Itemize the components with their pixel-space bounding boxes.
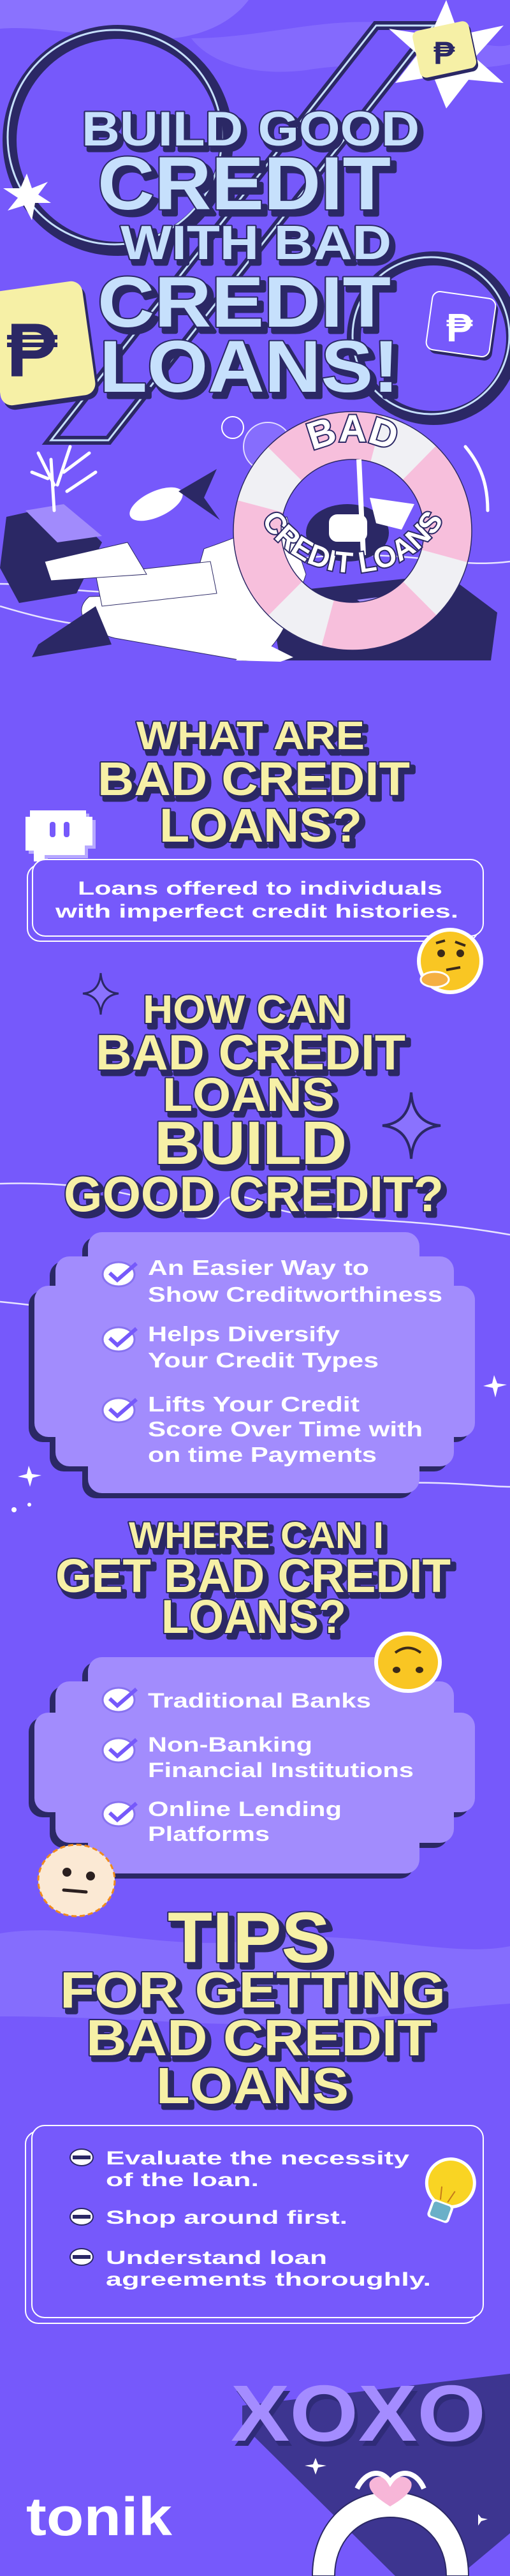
panel: where to get: Financial Institutions xyxy=(148,1759,414,1782)
icon: check 1 xyxy=(103,1262,136,1286)
logo: tonik: tonik xyxy=(26,2487,172,2547)
title: LOANS! xyxy=(104,331,404,413)
heading: where can i get bad credit loans: LOANS? xyxy=(161,1590,346,1643)
xoxo: XOXO xyxy=(234,2374,489,2463)
definition box xyxy=(27,860,483,941)
icon: minus 1 xyxy=(70,2149,93,2166)
panel: how it builds credit: Show Creditworthiness xyxy=(148,1283,442,1306)
tips box: Understand loan xyxy=(106,2247,327,2268)
icon: small stars xyxy=(11,1375,507,1512)
icon: check 2 xyxy=(103,1327,136,1351)
heading: what are bad credit loans: LOANS? xyxy=(159,799,362,852)
panel: where to get: Non-Banking xyxy=(148,1733,312,1756)
xoxo: XOXO xyxy=(231,2369,486,2458)
heading: how can bad credit loans build good credit: BAD CREDIT xyxy=(99,1029,409,1085)
title: CREDIT xyxy=(98,262,391,342)
heading: where can i get bad credit loans: GET BAD CREDIT xyxy=(59,1554,455,1607)
heading: how can bad credit loans build good credit: LOANS xyxy=(166,1073,339,1126)
heading: how can bad credit loans build good credit: GOOD CREDIT? xyxy=(68,1170,448,1226)
panel: how it builds credit: Helps Diversify xyxy=(148,1322,340,1346)
icon: peso coin right xyxy=(425,290,499,362)
panel: how it builds credit: An Easier Way to xyxy=(148,1256,369,1279)
illustration: diver with life ring: BAD xyxy=(305,413,398,451)
icon: pixel speech bubble xyxy=(26,810,96,865)
panel: how it builds credit: Your Credit Types xyxy=(148,1348,379,1372)
heading: how can bad credit loans build good credit: BUILD xyxy=(158,1113,351,1182)
icon: peso coin top right with starburst xyxy=(389,0,504,108)
heading: where can i get bad credit loans: LOANS? xyxy=(165,1595,350,1648)
heading: tips for getting bad credit loans: BAD CREDIT xyxy=(90,2014,435,2071)
icon: minus 2 xyxy=(70,2208,93,2225)
panel: where to get xyxy=(29,1657,475,1879)
definition box: with imperfect credit histories. xyxy=(55,901,458,922)
heading: tips for getting bad credit loans: LOANS xyxy=(156,2057,349,2114)
title xyxy=(82,102,423,413)
panel: where to get: Platforms xyxy=(148,1822,270,1845)
heading: how can bad credit loans build good credit: BUILD xyxy=(154,1109,347,1177)
icon: sparkle small xyxy=(305,2458,488,2526)
heading: how can bad credit loans build good credit xyxy=(64,988,448,1226)
icon: peso coin left: ₱ xyxy=(6,308,58,393)
title: BUILD GOOD xyxy=(82,102,419,156)
icon: white star left xyxy=(3,174,51,220)
tips box: agreements thoroughly. xyxy=(106,2269,431,2290)
icon: check b xyxy=(103,1738,136,1762)
heading: where can i get bad credit loans: WHERE CAN I xyxy=(133,1519,388,1561)
heading: tips for getting bad credit loans: TIPS xyxy=(168,1898,330,1977)
title: WITH BAD xyxy=(120,216,391,269)
heading: what are bad credit loans xyxy=(98,714,414,856)
heading: tips for getting bad credit loans: FOR GETTING xyxy=(60,1962,446,2018)
title: CREDIT xyxy=(102,147,395,231)
heading: what are bad credit loans: WHAT ARE xyxy=(140,718,368,763)
wave lines xyxy=(0,555,510,1487)
icon: light bulb xyxy=(413,2150,483,2229)
icon: check a xyxy=(103,1688,136,1712)
panel: how it builds credit: Score Over Time with xyxy=(148,1417,423,1441)
panel: how it builds credit xyxy=(29,1232,475,1498)
heading: where can i get bad credit loans: GET BAD CREDIT xyxy=(55,1549,451,1602)
tips box: Evaluate the necessity xyxy=(106,2148,409,2169)
panel: where to get: Traditional Banks xyxy=(148,1689,371,1712)
heading: tips for getting bad credit loans: BAD CREDIT xyxy=(86,2009,432,2066)
icon: upside-down emoji xyxy=(374,1632,442,1693)
heading: what are bad credit loans: BAD CREDIT xyxy=(98,752,410,805)
illustration: diver with life ring xyxy=(0,411,497,662)
icon: check 3 xyxy=(103,1398,136,1422)
icon: sparkle left xyxy=(83,973,119,1015)
heading: what are bad credit loans: LOANS? xyxy=(163,803,366,856)
definition box: Loans offered to individuals xyxy=(78,878,442,899)
heading: how can bad credit loans build good credit: GOOD CREDIT? xyxy=(64,1166,444,1222)
icon: peso coin right: ₱ xyxy=(446,306,473,350)
heading: tips for getting bad credit loans: LOANS xyxy=(160,2062,353,2118)
title: LOANS! xyxy=(99,326,399,408)
heading: how can bad credit loans build good credit: BAD CREDIT xyxy=(96,1024,405,1080)
background deco: big outlined shapes xyxy=(8,26,510,440)
icon: peso coin left xyxy=(0,279,100,412)
xoxo xyxy=(231,2369,510,2576)
icon: hands heart xyxy=(312,2473,469,2576)
title: BUILD GOOD xyxy=(85,107,423,161)
panel: how it builds credit: on time Payments xyxy=(148,1443,377,1466)
icon: neutral face xyxy=(38,1845,115,1916)
icon: sparkle right big xyxy=(382,1092,441,1159)
heading: tips for getting bad credit loans xyxy=(60,1898,449,2118)
heading: where can i get bad credit loans: WHERE CAN I xyxy=(129,1515,384,1556)
heading: tips for getting bad credit loans: FOR GETTING xyxy=(64,1966,449,2023)
heading: what are bad credit loans: WHAT ARE xyxy=(136,714,365,758)
title: CREDIT xyxy=(98,142,391,226)
icon: peso coin top right with starburst: ₱ xyxy=(433,35,455,71)
tips box xyxy=(26,2126,483,2323)
tips box: of the loan. xyxy=(106,2170,259,2191)
heading: how can bad credit loans build good credit: HOW CAN xyxy=(147,992,351,1036)
heading: tips for getting bad credit loans: TIPS xyxy=(172,1903,335,1983)
illustration: diver with life ring: CREDIT LOANS xyxy=(264,510,442,574)
heading: what are bad credit loans: BAD CREDIT xyxy=(101,757,414,810)
tips box: Shop around first. xyxy=(106,2207,347,2228)
panel: where to get: Online Lending xyxy=(148,1798,342,1820)
title: WITH BAD xyxy=(124,220,395,274)
heading: how can bad credit loans build good credit: LOANS xyxy=(163,1068,335,1121)
icon: thinking emoji xyxy=(417,928,483,994)
icon: minus 3 xyxy=(70,2249,93,2265)
panel: how it builds credit: Lifts Your Credit xyxy=(148,1392,360,1416)
heading: how can bad credit loans build good credit: HOW CAN xyxy=(143,988,347,1032)
icon: check c xyxy=(103,1802,136,1826)
title: CREDIT xyxy=(102,267,395,347)
heading: where can i get bad credit loans xyxy=(55,1515,455,1648)
